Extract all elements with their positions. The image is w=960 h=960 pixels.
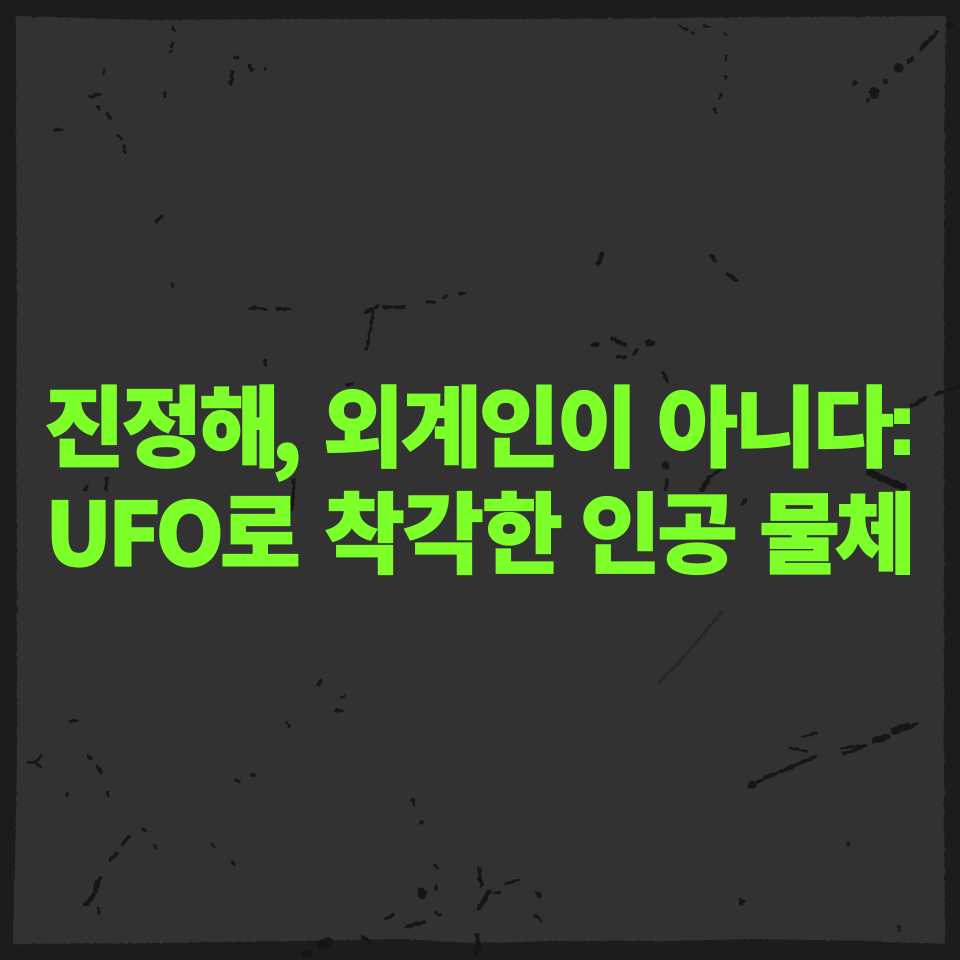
- lower-right streak: [752, 756, 816, 785]
- title line 2: [45, 465, 911, 592]
- mid-left scratches: [250, 308, 290, 309]
- title line 2: 인공: [580, 465, 735, 592]
- centre-right scratches: [592, 253, 625, 345]
- top-left speck cluster: [231, 57, 252, 84]
- bottom-centre cluster: [363, 915, 424, 941]
- title line 2: 착각한: [324, 465, 561, 592]
- top-right streak: [908, 32, 937, 62]
- title line 1: [44, 358, 916, 486]
- specks near the title: [912, 386, 960, 406]
- title line 2: 물체: [759, 465, 911, 592]
- title line 1: 진정해,: [44, 358, 299, 486]
- title line 1: :: [888, 377, 916, 471]
- title: [44, 358, 916, 592]
- lower-left diagonal: [85, 836, 129, 905]
- top-right border nick: [948, 24, 952, 27]
- title line 1: 아니다: [657, 358, 891, 486]
- lower-left specks: [28, 755, 41, 767]
- splotches on the bottom border: [317, 936, 333, 950]
- title line 2: UFO로: [45, 465, 298, 592]
- title line 1: 외계인이: [323, 358, 635, 486]
- centre-left T scratch: [366, 312, 373, 349]
- faint marks lower right: [740, 843, 899, 930]
